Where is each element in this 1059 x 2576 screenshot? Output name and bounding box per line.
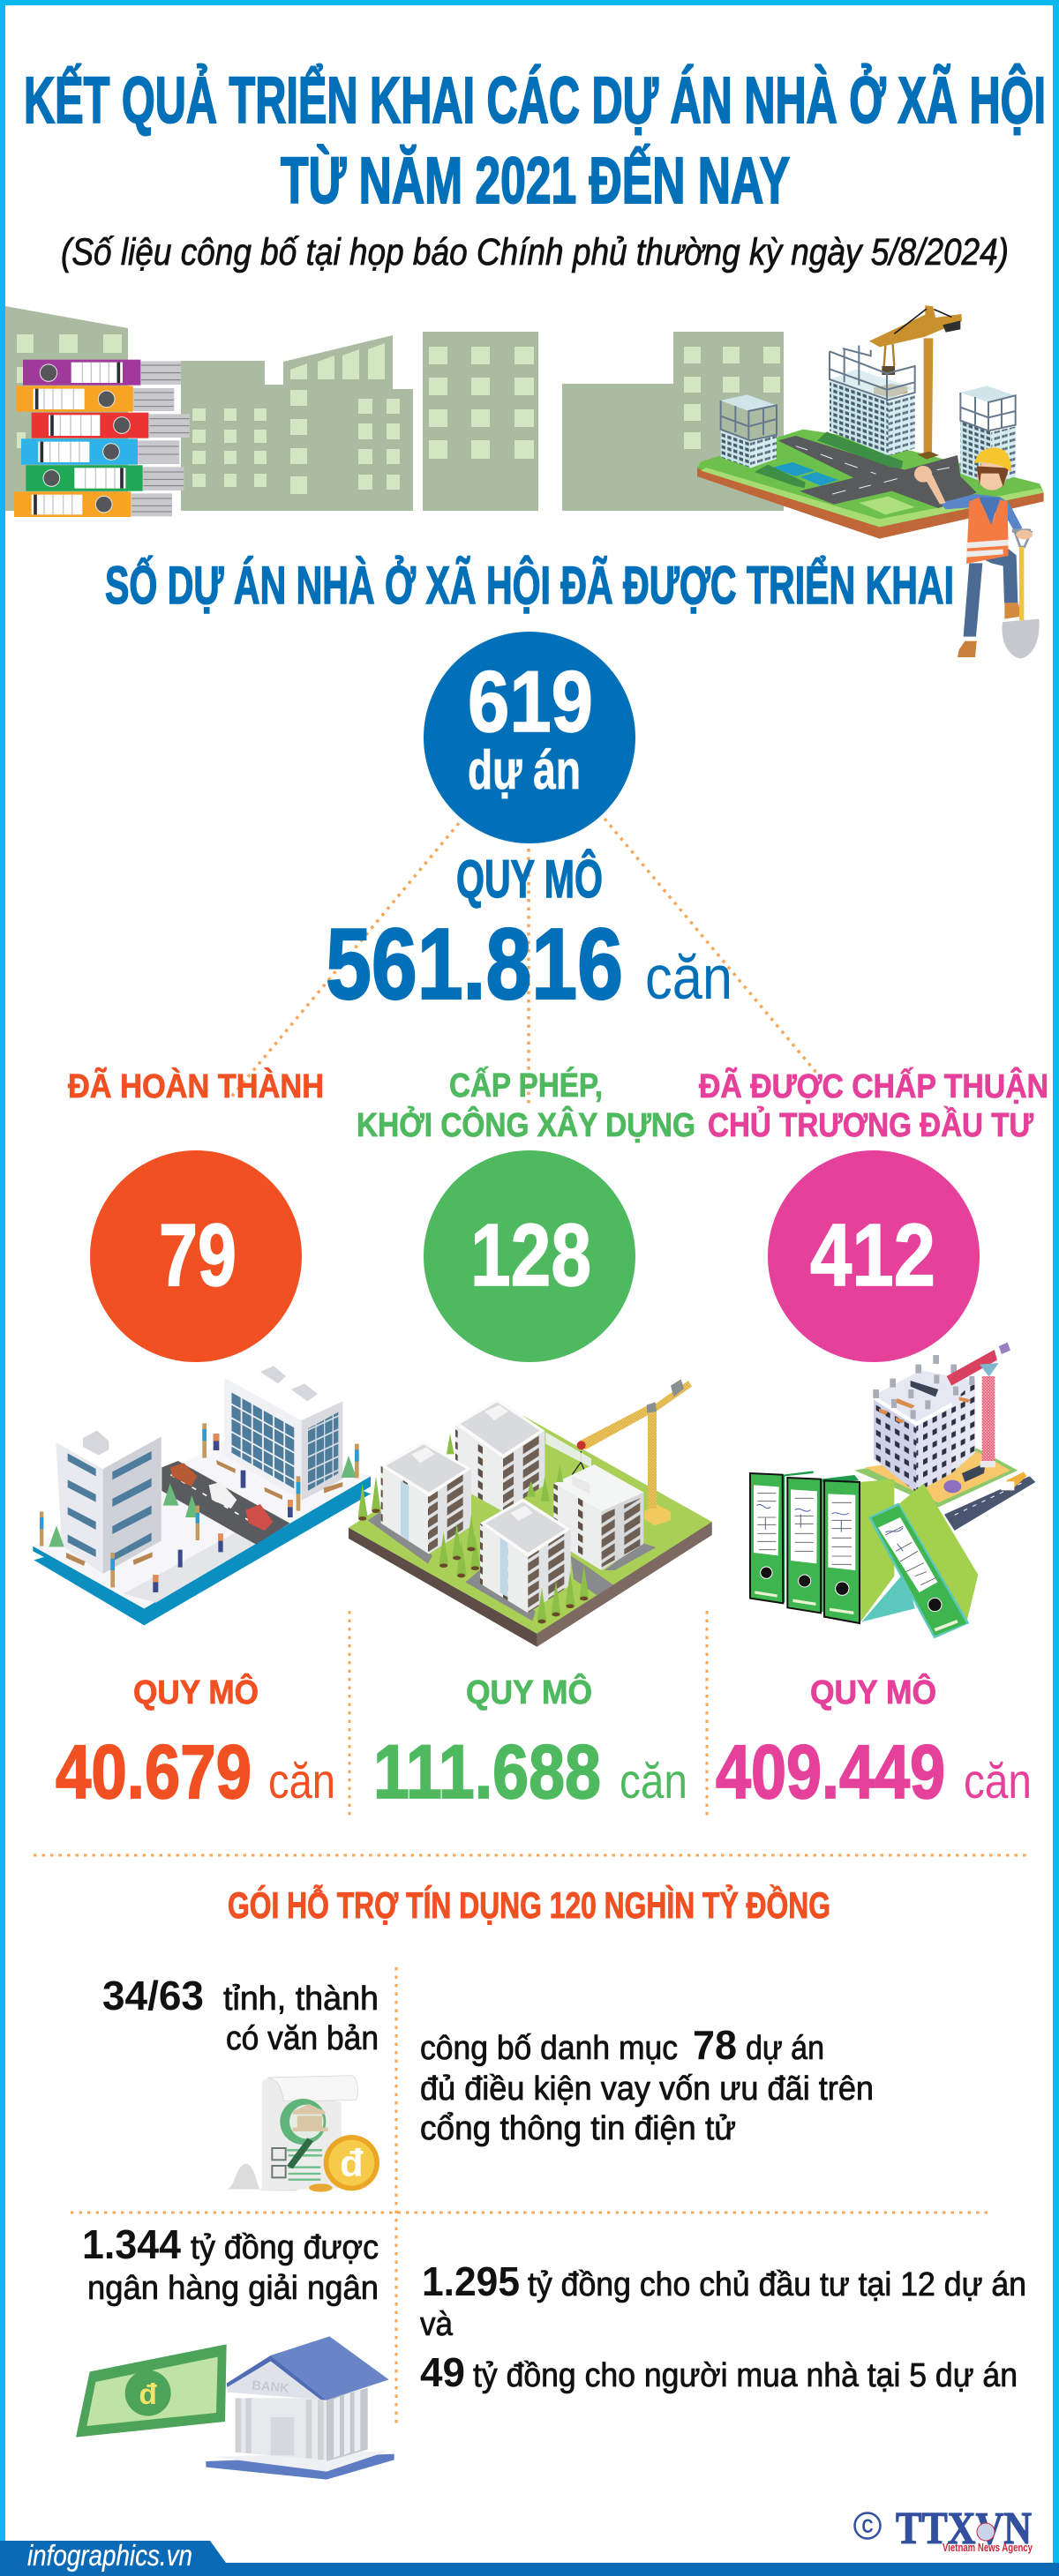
text: publish list xyxy=(420,2022,874,2147)
red crane xyxy=(947,1343,1010,1467)
total scale: QUY MÔ xyxy=(456,850,603,909)
right building xyxy=(224,1357,342,1501)
label: licensed: CẤP PHÉP, xyxy=(449,1066,603,1105)
title: TỪ NĂM 2021 ĐẾN NAY xyxy=(281,144,790,217)
text: investor disbursement: 1.295 xyxy=(422,2258,520,2304)
text: publish list: đủ điều kiện vay vốn ưu đãi trên xyxy=(420,2071,874,2108)
circle: 128 xyxy=(424,1150,635,1362)
total scale xyxy=(326,850,732,1021)
tower crane xyxy=(572,1379,692,1525)
text: investor disbursement: tỷ đồng cho người mua nhà tại 5 dự án xyxy=(473,2357,1018,2394)
icon: bank building: BANK xyxy=(252,2378,290,2396)
trees and lamp posts xyxy=(40,1423,359,1587)
stat: completed scale xyxy=(56,1672,335,1815)
illustration: construction site with worker xyxy=(697,305,1044,659)
construction building xyxy=(553,1464,643,1570)
label: approved xyxy=(699,1067,1048,1144)
dotted connector lines xyxy=(229,819,817,1105)
illustration: approved projects binders and site xyxy=(750,1343,1035,1638)
front building xyxy=(480,1498,571,1613)
back building xyxy=(455,1398,545,1511)
text: publish list: cổng thông tin điện tử xyxy=(420,2110,736,2147)
column divider dots xyxy=(349,1611,707,1817)
icon: bank building xyxy=(206,2336,394,2480)
heading: credit package: GÓI HỖ TRỢ TÍN DỤNG 120 NGHÌN TỶ ĐỒNG xyxy=(228,1883,830,1926)
stat: completed scale: QUY MÔ xyxy=(133,1672,259,1711)
stat: licensed scale: căn xyxy=(620,1753,687,1808)
label: licensed xyxy=(357,1066,695,1144)
stat: licensed scale: 111.688 xyxy=(373,1730,601,1815)
background city skyline xyxy=(5,306,784,511)
stat: licensed scale: QUY MÔ xyxy=(466,1672,592,1711)
circle: 412: 412 xyxy=(810,1206,935,1305)
icon: banknote: đ xyxy=(139,2378,157,2411)
icon: banknote xyxy=(76,2344,227,2437)
label: licensed: KHỞI CÔNG XÂY DỰNG xyxy=(357,1105,695,1144)
text: investor disbursement xyxy=(420,2258,1026,2395)
text: disbursed: ngân hàng giải ngân xyxy=(87,2270,379,2307)
text: provinces xyxy=(102,1973,379,2057)
building xyxy=(873,1355,1026,1493)
footer band xyxy=(0,2539,1059,2576)
circle: 79: 79 xyxy=(159,1206,237,1305)
text: disbursed: 1.344 xyxy=(82,2221,181,2267)
circle: 412 xyxy=(768,1150,980,1362)
text: provinces: có văn bản xyxy=(226,2020,379,2057)
text: investor disbursement: và xyxy=(420,2306,454,2343)
platform base xyxy=(697,430,1044,539)
left building xyxy=(381,1441,471,1554)
circle: total projects: dự án xyxy=(468,740,581,801)
label: completed: ĐÃ HOÀN THÀNH xyxy=(68,1067,324,1105)
site ground and road xyxy=(854,1449,1035,1531)
stat: approved scale: QUY MÔ xyxy=(810,1672,936,1711)
crane xyxy=(869,305,962,460)
logo: TTXVN xyxy=(854,2504,1033,2554)
binder I xyxy=(750,1471,814,1604)
text: provinces: 34/63 xyxy=(102,1973,204,2018)
binder II xyxy=(787,1475,859,1613)
trees xyxy=(358,1434,589,1621)
stat: approved scale xyxy=(716,1672,1032,1815)
logo: TTXVN: TTXVN xyxy=(896,2504,1032,2554)
people xyxy=(153,1434,293,1592)
text: publish list: 78 xyxy=(693,2022,737,2068)
text: publish list: dự án xyxy=(746,2030,824,2067)
stat: completed scale: căn xyxy=(268,1753,335,1808)
stat: licensed scale xyxy=(373,1672,687,1815)
building frames xyxy=(721,346,1016,485)
footer band: infographics.vn xyxy=(27,2539,192,2572)
text: provinces: tỉnh, thành xyxy=(223,1981,379,2018)
icon: document with coin: đ xyxy=(340,2143,364,2185)
text: disbursed xyxy=(82,2221,379,2307)
worker xyxy=(914,447,1040,659)
left building xyxy=(56,1410,161,1574)
binder III xyxy=(824,1479,894,1623)
text: disbursed: tỷ đồng được xyxy=(191,2229,379,2266)
binder IV xyxy=(862,1484,978,1638)
text: investor disbursement: tỷ đồng cho chủ đầu tư tại 12 dự án xyxy=(528,2266,1026,2303)
icon: document with coin xyxy=(227,2076,379,2192)
circle: total projects: 619 xyxy=(468,653,593,750)
illustration: buildings under construction xyxy=(349,1379,712,1647)
stat: approved scale: 409.449 xyxy=(716,1730,945,1815)
stat: approved scale: căn xyxy=(964,1753,1032,1808)
stat: completed scale: 40.679 xyxy=(56,1730,252,1815)
total scale: 561.816 xyxy=(326,909,623,1021)
circle: total projects xyxy=(424,632,635,843)
text: investor disbursement: 49 xyxy=(420,2349,465,2395)
circle: 128: 128 xyxy=(470,1206,591,1305)
road vehicles xyxy=(170,1463,273,1531)
circle: 79 xyxy=(90,1150,302,1362)
total scale: căn xyxy=(645,943,732,1012)
logo: TTXVN: C xyxy=(861,2515,874,2537)
text: publish list: công bố danh mục xyxy=(420,2030,678,2067)
illustration: completed buildings xyxy=(33,1357,371,1625)
title xyxy=(24,64,1046,217)
icon: stack of binders xyxy=(14,360,190,517)
